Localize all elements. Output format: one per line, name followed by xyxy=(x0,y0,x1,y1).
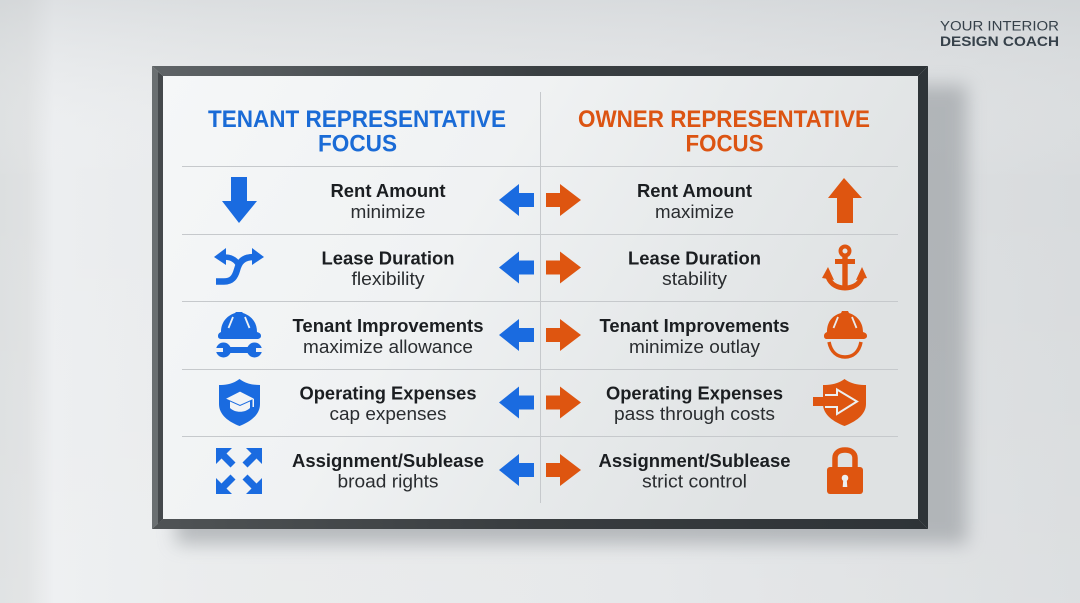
owner rent amount text: maximize xyxy=(655,202,734,222)
icon: up arrow xyxy=(828,178,862,223)
owner operating expenses text: pass through costs xyxy=(614,404,775,424)
tenant improvements text: Tenant Improvements xyxy=(292,316,484,336)
brand logo: YOUR INTERIOR xyxy=(940,18,1059,34)
icon: shield with pass-through arrow xyxy=(813,379,866,426)
tenant improvements text: maximize allowance xyxy=(303,337,473,357)
tenant rent amount text: minimize xyxy=(350,202,426,222)
owner operating expenses text: Operating Expenses xyxy=(606,384,783,404)
tenant rent amount text: Rent Amount xyxy=(330,181,446,201)
tenant assignment text xyxy=(292,451,484,492)
icon: hard hat with strap xyxy=(824,311,867,357)
icon: diverging flexible arrows xyxy=(214,248,264,282)
tenant assignment text: Assignment/Sublease xyxy=(292,451,484,471)
picture frame xyxy=(152,66,928,529)
center orange arrows pointing right xyxy=(546,184,581,486)
center blue arrows pointing left xyxy=(499,184,534,486)
owner operating expenses text xyxy=(606,384,783,424)
owner lease duration text xyxy=(628,248,761,289)
icon: shield with graduation cap xyxy=(219,379,260,426)
tenant operating expenses text: Operating Expenses xyxy=(300,384,476,404)
heading: tenant representative focus: TENANT REPRESENTATIVE xyxy=(208,106,506,133)
brand logo xyxy=(940,18,1059,49)
icon: padlock xyxy=(827,450,863,494)
owner rent amount text: Rent Amount xyxy=(637,181,752,201)
heading: tenant representative focus: FOCUS xyxy=(318,130,397,158)
tenant operating expenses text xyxy=(300,384,476,424)
heading: tenant representative focus xyxy=(208,106,506,158)
icon: expand arrows xyxy=(216,448,262,494)
frame shadow xyxy=(176,85,967,544)
tenant lease duration text: flexibility xyxy=(352,269,424,289)
owner improvements text: minimize outlay xyxy=(629,337,760,357)
owner assignment text xyxy=(598,451,790,492)
tenant assignment text: broad rights xyxy=(338,472,438,492)
owner lease duration text: Lease Duration xyxy=(628,248,761,268)
heading: owner representative focus: OWNER REPRESENTATIVE xyxy=(578,106,870,133)
tenant lease duration text: Lease Duration xyxy=(322,248,454,268)
owner assignment text: strict control xyxy=(642,472,747,492)
icon: down arrow xyxy=(222,177,257,223)
owner lease duration text: stability xyxy=(662,269,727,289)
owner assignment text: Assignment/Sublease xyxy=(598,451,790,471)
tenant rent amount text xyxy=(330,181,446,222)
heading: owner representative focus xyxy=(578,106,870,158)
tenant operating expenses text: cap expenses xyxy=(330,404,446,424)
owner rent amount text xyxy=(637,181,752,222)
icon: anchor xyxy=(822,246,867,289)
tenant lease duration text xyxy=(322,248,454,289)
table dividers xyxy=(182,92,898,503)
tenant improvements text xyxy=(292,316,484,357)
owner improvements text: Tenant Improvements xyxy=(600,316,790,336)
heading: owner representative focus: FOCUS xyxy=(686,130,764,158)
owner improvements text xyxy=(600,316,790,357)
brand logo: DESIGN COACH xyxy=(940,33,1059,49)
icon: hard hat and wrench xyxy=(213,312,266,358)
